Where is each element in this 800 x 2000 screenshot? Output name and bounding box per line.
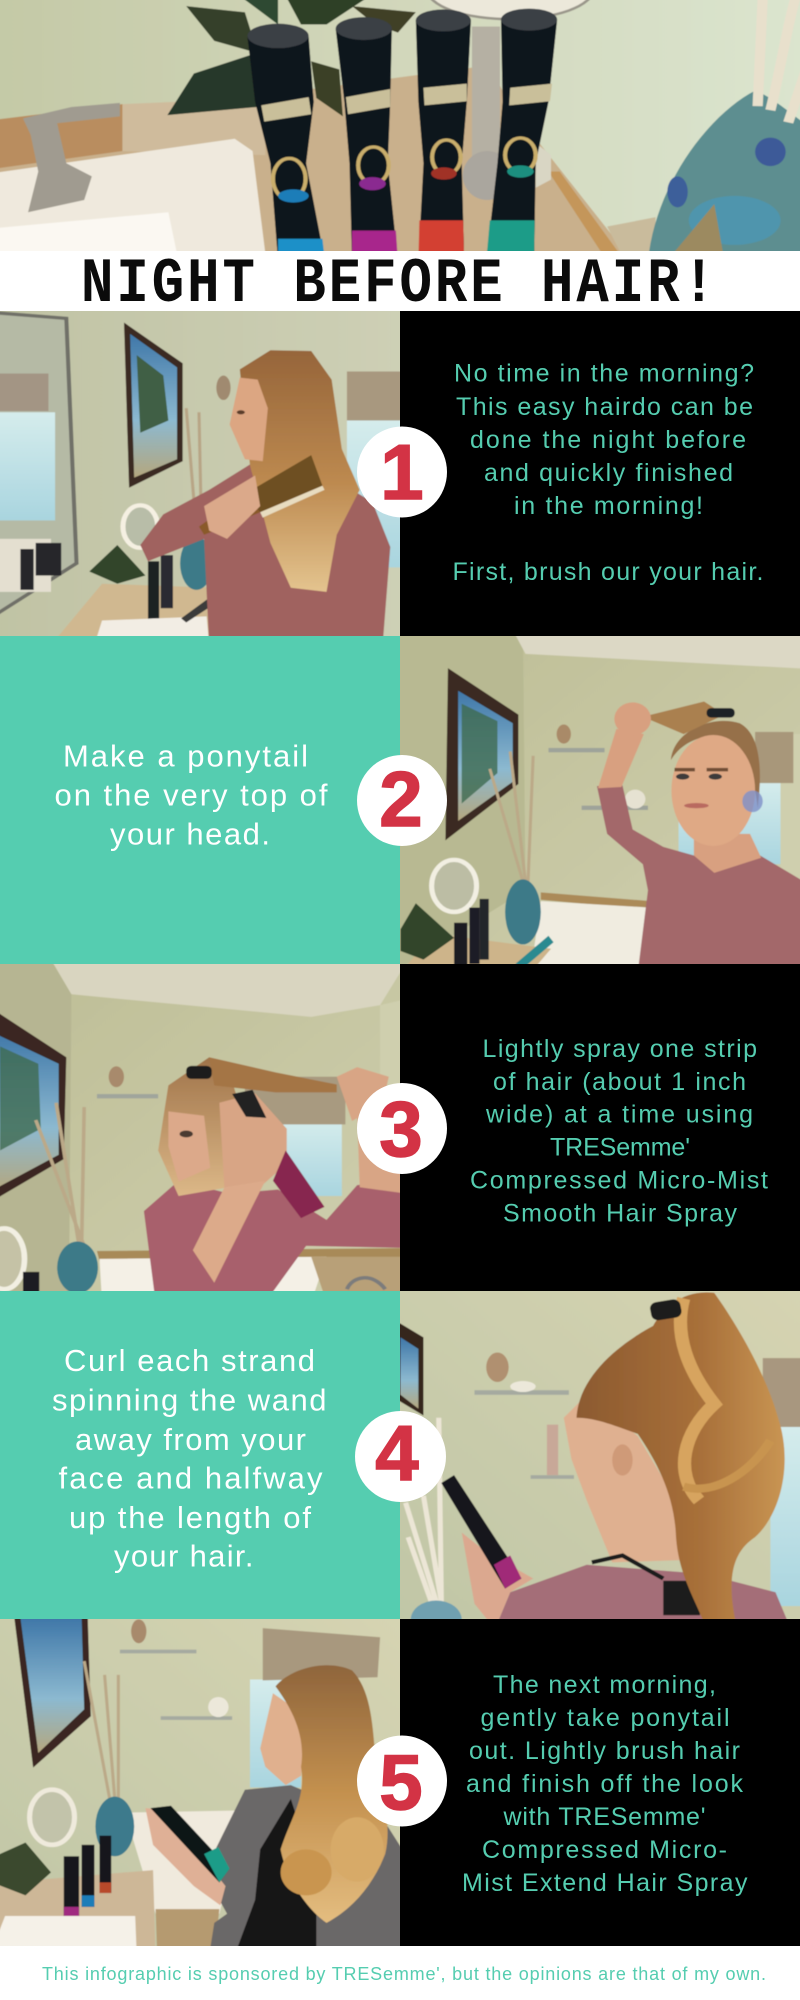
photo: girl with finished curls holding spray xyxy=(0,1611,413,1955)
panel: step 2 xyxy=(0,630,800,973)
text block: spray instructions on black: wide) at a time using xyxy=(485,1100,753,1128)
bottle: boost xyxy=(416,9,471,261)
number badge 1 xyxy=(357,426,447,518)
text block: curl each strand on teal: Curl each strand xyxy=(64,1343,315,1378)
number badge 5: 5 xyxy=(379,1738,423,1826)
panel: step 1 xyxy=(0,306,800,645)
photo: girl brushing her hair xyxy=(0,306,413,645)
text block: intro on black: First, brush our your hair. xyxy=(452,558,764,586)
footer disclosure: This infographic is sponsored by TRESemme', but the opinions are that of my own. xyxy=(42,1964,766,1984)
text block: next morning on black: Mist Extend Hair Spray xyxy=(462,1869,748,1897)
text block: next morning on black: Compressed Micro- xyxy=(482,1836,727,1864)
text block: spray instructions on black: TRESemme' xyxy=(550,1134,690,1162)
number badge 3: 3 xyxy=(379,1085,423,1173)
text block: curl each strand on teal: spinning the wand xyxy=(52,1382,326,1418)
text block: curl each strand on teal xyxy=(0,1291,400,1619)
text block: curl each strand on teal: away from your xyxy=(75,1422,306,1457)
text block: intro on black: in the morning! xyxy=(514,492,703,520)
text block: intro on black: done the night before xyxy=(470,426,746,454)
number badge 2: 2 xyxy=(379,755,423,843)
photo: girl holding up a ponytail xyxy=(393,630,800,973)
number badge 4: 4 xyxy=(375,1409,419,1497)
number badge 1: 1 xyxy=(380,428,424,516)
number badge 5 xyxy=(357,1736,447,1826)
bottle: smooth xyxy=(336,17,398,261)
text block: next morning on black: The next morning, xyxy=(493,1671,716,1699)
text block: spray instructions on black: Smooth Hair Spray xyxy=(503,1200,738,1228)
text block: next morning on black xyxy=(400,1619,800,1946)
number badge 2 xyxy=(357,755,447,846)
text block: next morning on black: gently take ponytail xyxy=(480,1704,730,1732)
vase with sticks xyxy=(648,0,800,261)
text block: curl each strand on teal: your hair. xyxy=(114,1538,254,1574)
title: NIGHT BEFORE HAIR! xyxy=(81,249,715,320)
photo: four hair spray bottles on a bathroom counter xyxy=(0,0,800,261)
text block: make a ponytail on teal: Make a ponytail xyxy=(63,738,308,774)
text block: spray instructions on black: Compressed Micro-Mist xyxy=(470,1166,768,1194)
text block: intro on black: No time in the morning? xyxy=(454,360,754,388)
text block: curl each strand on teal: face and halfway xyxy=(58,1460,323,1496)
title banner xyxy=(0,249,800,320)
panel: step 3 xyxy=(0,960,800,1302)
number badge 3 xyxy=(357,1083,447,1174)
text block: intro on black: This easy hairdo can be xyxy=(456,393,753,421)
text block: curl each strand on teal: up the length of xyxy=(69,1500,311,1535)
panel: step 5 xyxy=(0,1611,800,1955)
text block: next morning on black: out. Lightly brush hair xyxy=(469,1737,740,1765)
photo: girl spraying a strip of hair xyxy=(0,960,413,1302)
text block: intro on black: and quickly finished xyxy=(484,459,733,487)
text block: spray instructions on black: of hair (about 1 inch xyxy=(493,1068,746,1096)
text block: make a ponytail on teal: your head. xyxy=(110,816,270,852)
bottle: extend xyxy=(486,9,557,261)
text block: spray instructions on black: Lightly spray one strip xyxy=(482,1035,757,1063)
number badge 4 xyxy=(355,1409,446,1502)
bottle: texture xyxy=(247,24,325,261)
text block: make a ponytail on teal xyxy=(0,636,400,964)
photo: curled ponytail seen from behind xyxy=(400,1291,800,1619)
text block: spray instructions on black xyxy=(400,964,800,1291)
panel: step 4 xyxy=(0,1280,800,1639)
text block: next morning on black: with TRESemme' xyxy=(502,1803,706,1831)
text block: next morning on black: and finish off the look xyxy=(466,1770,744,1798)
text block: make a ponytail on teal: on the very top of xyxy=(54,778,328,812)
text block: intro on black xyxy=(400,311,800,636)
